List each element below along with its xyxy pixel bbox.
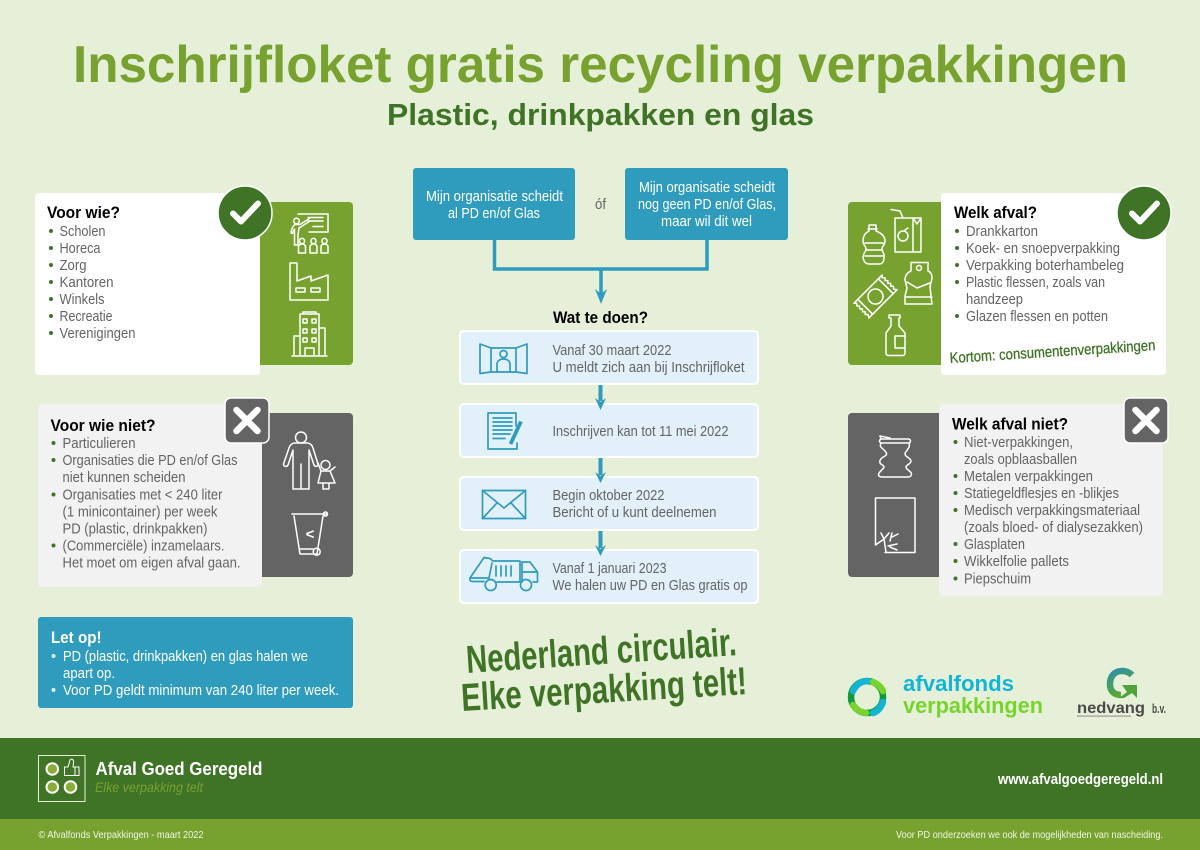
icon: koekverpakking <box>854 275 897 318</box>
list: doelgroepen: Zorg <box>60 258 87 274</box>
title: Inschrijfloket gratis recycling verpakkingen <box>73 36 1128 94</box>
list: doelgroepen: Recreatie <box>60 309 113 325</box>
icon: ingedeukt blik <box>878 436 912 477</box>
panel: voor wie <box>35 186 353 375</box>
arrow: stap 2 naar 3 <box>595 458 606 483</box>
icon: office building <box>292 312 327 356</box>
icon: afval goed geregeld logo <box>38 756 85 802</box>
panel: voor wie niet <box>38 398 353 587</box>
panel: keuze organisatie links: al PD en/of Glas <box>448 206 540 222</box>
list: doelgroepen <box>49 224 136 342</box>
panel: welk afval niet <box>848 398 1168 596</box>
list: uitgesloten groepen: Organisaties met < 240 liter <box>62 488 223 504</box>
step 4: Vanaf 1 januari 2023 <box>552 561 667 577</box>
panel: keuze organisatie rechts: Mijn organisatie scheidt <box>639 180 775 196</box>
light card <box>38 404 262 587</box>
step 3 <box>460 477 758 530</box>
step 4 <box>460 550 758 603</box>
icon: factory <box>290 263 328 300</box>
slogan: Nederland circulair. <box>465 621 738 682</box>
panel: keuze organisatie rechts: nog geen PD en/of Glas, <box>638 197 776 213</box>
list: niet toegestaan afval: Medisch verpakkingsmateriaal <box>964 503 1140 519</box>
footer note: Voor PD onderzoeken we ook de mogelijkheden van nascheiding. <box>896 829 1163 841</box>
list: niet toegestaan afval: zoals opblaasballen <box>964 452 1077 468</box>
step 2 <box>460 404 758 457</box>
list: uitgesloten groepen: Organisaties die PD en/of Glas <box>62 453 238 469</box>
list: niet toegestaan afval: Metalen verpakkingen <box>964 469 1093 485</box>
icon: glazen fles <box>886 315 905 356</box>
logo: nedvang: b.v. <box>1152 701 1166 716</box>
list: uitgesloten groepen: PD (plastic, drinkpakken) <box>62 522 208 538</box>
icon: plastic fles <box>863 225 885 264</box>
list: niet toegestaan afval: (zoals bloed- of dialysezakken) <box>964 520 1143 536</box>
icon: check badge <box>218 186 272 240</box>
footer tagline: Elke verpakking telt <box>95 779 204 795</box>
heading: voor wie: Voor wie? <box>47 203 120 222</box>
panel: keuze organisatie rechts: maar wil dit wel <box>661 214 752 230</box>
icon: teacher with pupils <box>291 214 328 253</box>
list: doelgroepen: Horeca <box>60 241 101 257</box>
list: niet toegestaan afval: Piepschuim <box>964 572 1031 588</box>
list: let op <box>52 649 339 699</box>
step 3: Begin oktober 2022 <box>552 488 665 504</box>
list: uitgesloten groepen: Het moet om eigen afval gaan. <box>62 556 240 572</box>
step 1: U meldt zich aan bij Inschrijfloket <box>552 360 745 376</box>
icon background: green panel <box>240 202 353 365</box>
list: let op: PD (plastic, drinkpakken) en glas halen we <box>63 649 308 665</box>
heading: voor wie niet: Voor wie niet? <box>50 416 156 435</box>
list: toegestaan afval: handzeep <box>966 292 1023 308</box>
step 3: Bericht of u kunt deelnemen <box>552 505 717 521</box>
list: toegestaan afval: Koek- en snoepverpakking <box>966 241 1120 257</box>
slogan: Elke verpakking telt! <box>460 660 748 720</box>
logo mark: G arrow <box>1110 671 1137 698</box>
arrow: connector naar wat te doen <box>494 240 707 304</box>
logo: nedvang <box>1077 671 1166 717</box>
step 4: We halen uw PD en Glas gratis op <box>552 578 748 594</box>
icon: minicontainer: < <box>306 526 315 543</box>
icon background: green panel <box>848 202 958 365</box>
logo: afvalfonds verpakkingen: verpakkingen <box>903 693 1043 718</box>
icon: cross badge <box>1124 398 1168 443</box>
arrow: stap 1 naar 2 <box>595 385 606 410</box>
logo: afvalfonds verpakkingen <box>851 671 1043 718</box>
label: of: óf <box>595 197 606 213</box>
list: niet toegestaan afval: Glasplaten <box>964 537 1025 553</box>
list: uitgesloten groepen: niet kunnen scheiden <box>62 470 186 486</box>
list: let op: Voor PD geldt minimum van 240 liter per week. <box>63 683 339 699</box>
list: niet toegestaan afval <box>954 435 1143 588</box>
footer brand name: Afval Goed Geregeld <box>96 759 262 779</box>
list: uitgesloten groepen <box>52 436 240 572</box>
list: toegestaan afval: Drankkarton <box>966 224 1038 240</box>
icon: cross badge <box>225 398 269 443</box>
list: uitgesloten groepen: (1 minicontainer) per week <box>62 504 218 520</box>
step 2: Inschrijven kan tot 11 mei 2022 <box>552 424 729 440</box>
list: niet toegestaan afval: Statiegeldflesjes en -blikjes <box>964 486 1119 502</box>
icon: check badge <box>1117 186 1171 240</box>
heading: welk afval: Welk afval? <box>954 203 1037 222</box>
heading: wat te doen: Wat te doen? <box>553 308 648 327</box>
logo: afvalfonds verpakkingen: afvalfonds <box>903 671 1014 696</box>
callout: let op <box>38 617 353 708</box>
icon: formulier <box>488 413 521 449</box>
list: let op: apart op. <box>63 666 115 682</box>
list: doelgroepen: Verenigingen <box>60 326 136 342</box>
icon: envelop <box>482 490 526 518</box>
arrow: stap 3 naar 4 <box>595 531 606 556</box>
list: uitgesloten groepen: (Commerciële) inzamelaars. <box>62 538 224 554</box>
icon: fles met pomp <box>905 262 932 304</box>
list: toegestaan afval: Plastic flessen, zoals van <box>966 275 1105 291</box>
panel: keuze organisatie rechts <box>625 168 788 240</box>
panel: welk afval <box>848 186 1171 375</box>
subtitle: Plastic, drinkpakken en glas <box>387 97 814 132</box>
list: toegestaan afval <box>955 224 1124 325</box>
icon background: grey panel <box>240 413 353 577</box>
icon: loket <box>480 344 527 374</box>
footer band <box>0 738 1200 850</box>
white card <box>941 193 1166 375</box>
icon: drinkpak <box>891 210 921 252</box>
list: uitgesloten groepen: Particulieren <box>62 436 136 452</box>
list: doelgroepen: Kantoren <box>60 275 114 291</box>
icon: adult with child <box>284 432 335 489</box>
light card <box>939 404 1163 596</box>
panel: keuze organisatie links: Mijn organisatie scheidt <box>426 189 563 205</box>
list: niet toegestaan afval: Niet-verpakkingen, <box>964 435 1073 451</box>
footer website: www.afvalgoedgeregeld.nl <box>997 771 1163 788</box>
list: doelgroepen: Winkels <box>60 292 104 308</box>
logo: nedvang: nedvang <box>1077 700 1145 717</box>
step 1 <box>460 331 758 384</box>
footer copyright: © Afvalfonds Verpakkingen - maart 2022 <box>38 829 204 841</box>
icon: gebarsten glasplaat <box>876 498 915 552</box>
icon: vuilniswagen <box>470 558 538 590</box>
list: toegestaan afval: Glazen flessen en potten <box>966 309 1108 325</box>
white card <box>35 193 260 375</box>
icon: minicontainer <box>292 512 328 555</box>
slogan <box>460 621 748 720</box>
note: kortom: Kortom: consumentenverpakkingen <box>949 337 1156 367</box>
list: niet toegestaan afval: Wikkelfolie pallets <box>964 554 1069 570</box>
icon background: grey panel <box>848 413 958 577</box>
heading: welk afval niet: Welk afval niet? <box>952 414 1068 434</box>
logo mark: ring <box>851 681 883 713</box>
step 1: Vanaf 30 maart 2022 <box>552 343 672 359</box>
heading: let op: Let op! <box>51 628 102 647</box>
panel: keuze organisatie links <box>413 168 575 240</box>
list: toegestaan afval: Verpakking boterhambeleg <box>966 258 1124 274</box>
list: doelgroepen: Scholen <box>60 224 106 240</box>
